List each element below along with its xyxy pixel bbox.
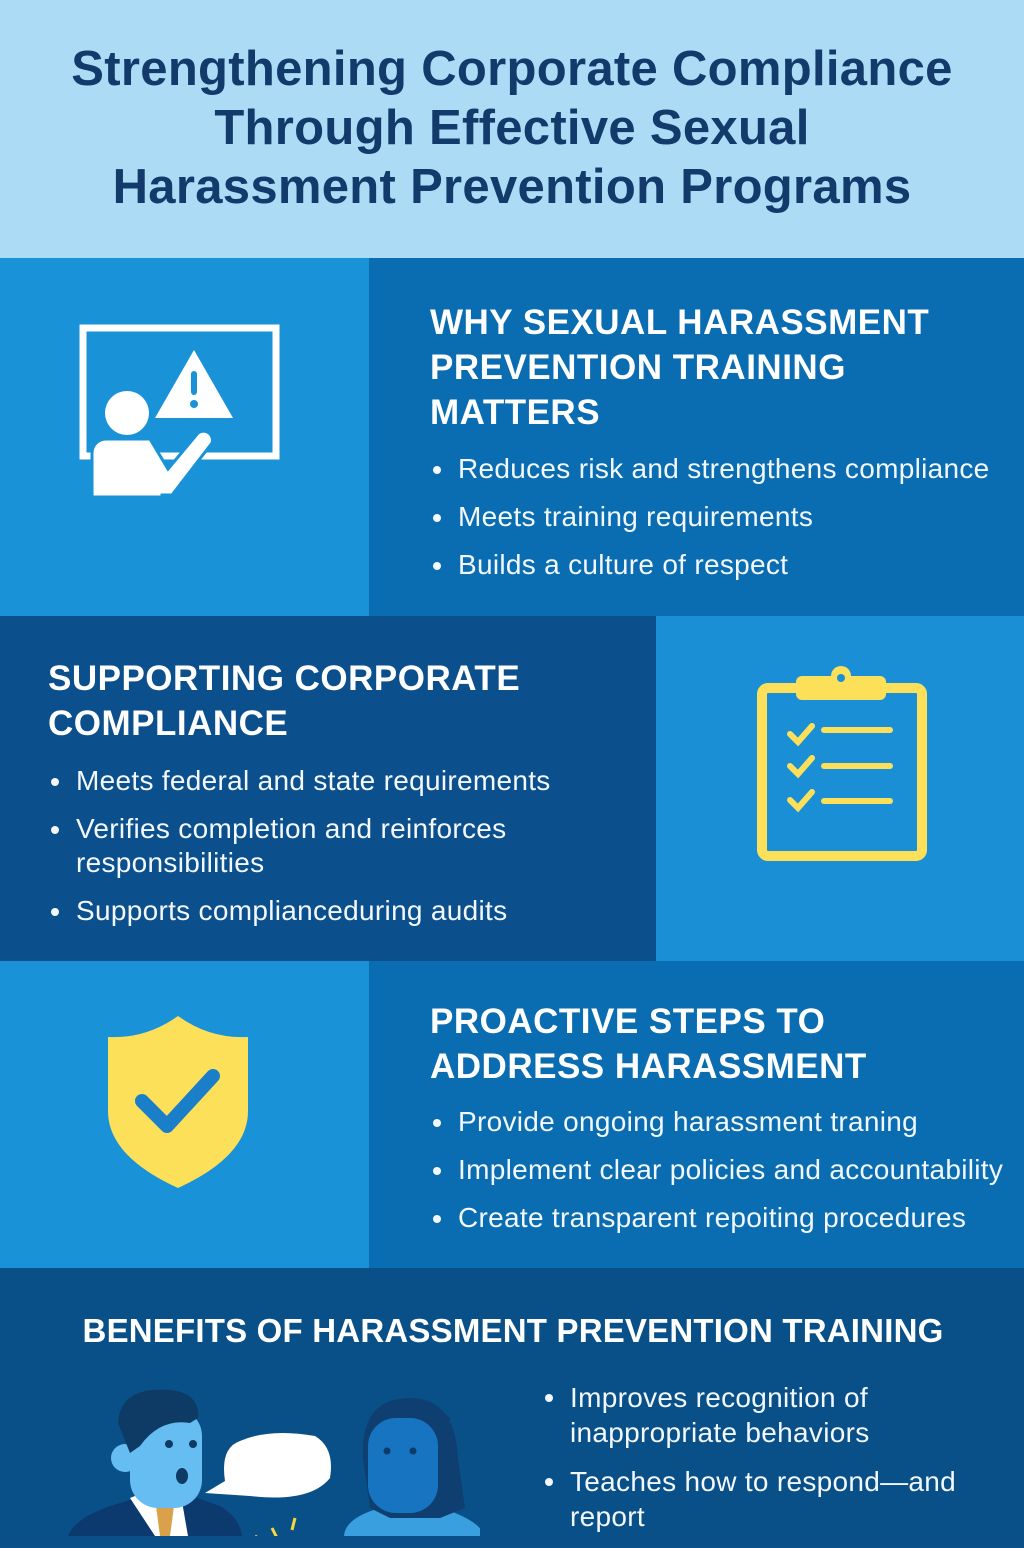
header panel [0, 0, 1024, 258]
panel: benefits [0, 1268, 1024, 1536]
panel: supporting compliance [0, 616, 1024, 961]
title [71, 42, 953, 214]
title: Strengthening Corporate Compliance [71, 42, 953, 96]
bullet list: Create transparent repoiting procedures [458, 1202, 966, 1233]
title: Harassment Prevention Programs [113, 160, 911, 214]
icon: shield [0, 961, 369, 1268]
bullet list: Builds a culture of respect [458, 549, 788, 580]
bullet list: Meets federal and state requirements [76, 765, 551, 796]
bullet list: Implement clear policies and accountability [458, 1154, 1003, 1185]
icon: clipboard [656, 616, 1024, 961]
bullet list: Teaches how to respond—and report [570, 1466, 956, 1532]
title: Through Effective Sexual [214, 101, 810, 155]
bullet list: Improves recognition of inappropriate behaviors [570, 1382, 870, 1448]
bullet list [545, 1382, 956, 1532]
bullet list [433, 1106, 1003, 1233]
heading: WHY SEXUAL HARASSMENT PREVENTION TRAINING MATTERS [430, 303, 929, 432]
heading: PROACTIVE STEPS TO ADDRESS HARASSMENT [430, 1002, 867, 1086]
bullet list: Reduces risk and strengthens compliance [458, 453, 990, 484]
icon: teacher with warning [0, 258, 369, 616]
panel: proactive steps [0, 961, 1024, 1268]
bullet list: Provide ongoing harassment traning [458, 1106, 918, 1137]
panel: why training matters [0, 258, 1024, 616]
bullet list: Verifies completion and reinforces responsibilities [76, 813, 506, 878]
illustration: two people talking [68, 1390, 480, 1536]
bullet list: Supports complianceduring audits [76, 895, 507, 926]
bullet list [433, 453, 990, 580]
bullet list [51, 765, 551, 926]
heading: SUPPORTING CORPORATE COMPLIANCE [48, 659, 520, 743]
bullet list: Meets training requirements [458, 501, 813, 532]
heading: BENEFITS OF HARASSMENT PREVENTION TRAINING [83, 1312, 943, 1349]
